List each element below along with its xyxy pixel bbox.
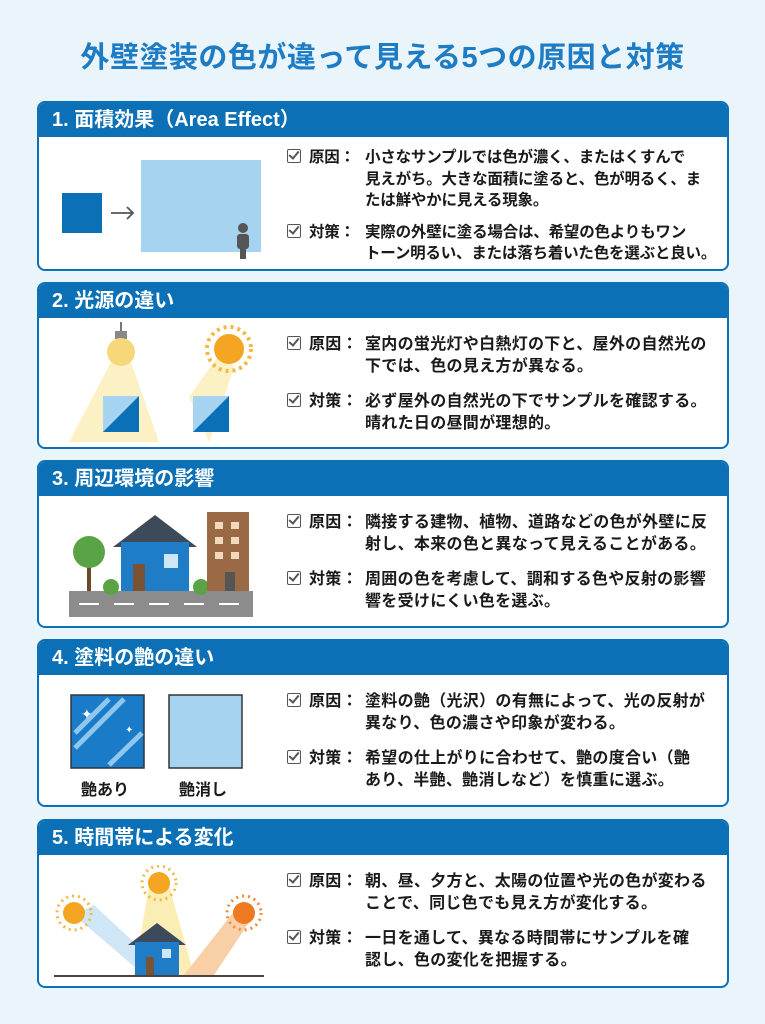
heading 3: 3. 周辺環境の影響 [52, 468, 214, 490]
text block 4: 原因： [309, 693, 358, 710]
text block 1: 原因： [309, 149, 355, 166]
text block 4: 対策： [309, 750, 358, 767]
text block 2: 必ず屋外の自然光の下でサンプルを確認する。 [365, 393, 707, 410]
text block 1: たは鮮やかに見える現象。 [365, 192, 548, 209]
text block 4: 塗料の艶（光沢）の有無によって、光の反射が [365, 693, 705, 710]
illustration: gloss vs matte: ✦ [125, 725, 133, 736]
heading 1 [39, 103, 727, 137]
text block 3 [287, 513, 707, 610]
text block 3: 原因： [309, 514, 358, 531]
panel: area effect [37, 101, 729, 271]
illustration: house, tree, building [69, 512, 253, 617]
text block 5: 一日を通して、異なる時間帯にサンプルを確 [365, 930, 689, 947]
heading 5: 5. 時間帯による変化 [52, 827, 234, 849]
text block 5 [287, 872, 707, 968]
illustration: suns and house [54, 865, 264, 977]
illustration: small to large square [62, 160, 261, 259]
text block 2 [287, 335, 707, 432]
heading 3 [39, 462, 727, 496]
text block 3: 響を受けにくい色を選ぶ。 [365, 592, 560, 610]
text block 1: 小さなサンプルでは色が濃く、またはくすんで [365, 149, 685, 166]
text block 4: 希望の仕上がりに合わせて、艶の度合い（艶 [365, 750, 690, 767]
text block 3: 対策： [309, 571, 358, 588]
text block 3: 隣接する建物、植物、道路などの色が外壁に反 [365, 514, 707, 531]
text block 1: 対策： [309, 224, 355, 240]
text block 1: 実際の外壁に塗る場合は、希望の色よりもワン [365, 224, 686, 240]
text block 3: 射し、本来の色と異なって見えることがある。 [365, 536, 706, 552]
illustration: gloss vs matte: 艶消し [179, 782, 227, 799]
heading 1: 1. 面積効果（Area Effect） [52, 109, 300, 131]
text block 1: 見えがち。大きな面積に塗ると、色が明るく、ま [365, 170, 701, 188]
illustration: bulb and sun [69, 322, 253, 442]
text block 4 [287, 692, 705, 788]
text block 5: ことで、同じ色でも見え方が変化する。 [365, 894, 657, 912]
panel: light source [37, 282, 729, 449]
panel: gloss [37, 639, 729, 807]
panel: time of day [37, 819, 729, 988]
text block 2: 原因： [309, 336, 358, 353]
panel: surroundings [37, 460, 729, 628]
text block 3: 周囲の色を考慮して、調和する色や反射の影響 [365, 571, 706, 588]
title: 外壁塗装の色が違って見える5つの原因と対策 [80, 42, 685, 74]
illustration: gloss vs matte: 艶あり [81, 782, 129, 799]
text block 2: 晴れた日の昼間が理想的。 [365, 414, 561, 432]
heading 4 [39, 641, 727, 675]
heading 2 [39, 284, 727, 318]
text block 5: 対策： [309, 930, 358, 947]
text block 4: 異なり、色の濃さや印象が変わる。 [365, 714, 625, 732]
text block 5: 認し、色の変化を把握する。 [365, 952, 577, 968]
text block 1: トーン明るい、または落ち着いた色を選ぶと良い。 [365, 245, 716, 262]
heading 5 [39, 821, 727, 855]
heading 2: 2. 光源の違い [52, 290, 174, 312]
text block 5: 原因： [309, 873, 358, 890]
text block 2: 対策： [309, 393, 358, 410]
text block 4: あり、半艶、艶消しなど）を慎重に選ぶ。 [365, 772, 674, 788]
text block 1 [287, 148, 716, 262]
text block 2: 室内の蛍光灯や白熱灯の下と、屋外の自然光の [365, 336, 707, 353]
illustration: gloss vs matte [70, 694, 243, 799]
illustration: gloss vs matte: ✦ [81, 706, 93, 722]
text block 2: 下では、色の見え方が異なる。 [365, 358, 593, 374]
text block 5: 朝、昼、夕方と、太陽の位置や光の色が変わる [365, 873, 707, 890]
heading 4: 4. 塗料の艶の違い [52, 647, 214, 669]
